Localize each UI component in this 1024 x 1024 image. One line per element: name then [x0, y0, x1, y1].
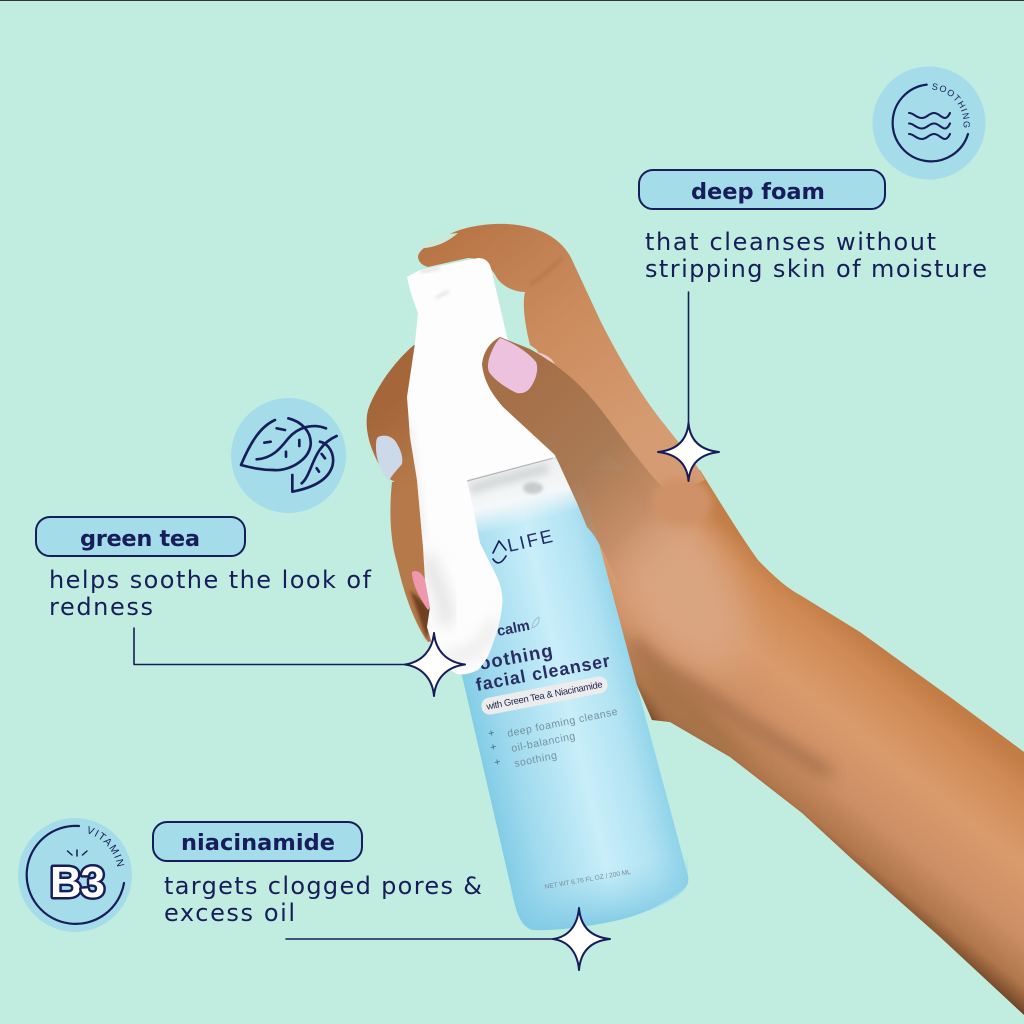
logo drop — [493, 541, 506, 563]
product name line 1: soothing — [466, 639, 555, 676]
product name line 2: facial cleanser — [474, 650, 612, 695]
logo text: LIFE — [505, 525, 557, 556]
badge: soothing: SOOTHING — [932, 84, 970, 128]
callout: niacinamide — [18, 818, 611, 971]
sparkle — [658, 423, 719, 481]
text: green tea: helps soothe the look of — [49, 566, 372, 594]
text: niacinamide: targets clogged pores & — [164, 872, 482, 900]
thumb — [482, 337, 714, 571]
pill: deep foam: deep foam — [691, 179, 825, 205]
bottle body — [420, 458, 688, 930]
net weight: NET WT 6.76 FL OZ / 200 ML — [544, 869, 632, 891]
text: deep foam: stripping skin of moisture — [645, 255, 987, 283]
foam — [407, 258, 555, 674]
benefit bullets: oil-balancing — [510, 730, 577, 755]
benefit bullets: + — [487, 727, 496, 740]
text: niacinamide: excess oil — [164, 899, 295, 927]
badge: vitamin B3 — [18, 818, 132, 932]
benefit bullets: soothing — [513, 749, 558, 770]
lower dark finger — [410, 590, 432, 640]
leaf mark — [532, 617, 539, 628]
leader line — [688, 292, 690, 426]
left fingers — [367, 345, 440, 642]
badge: soothing — [872, 66, 986, 180]
benefit bullets — [487, 706, 619, 770]
text: deep foam — [645, 228, 987, 283]
callout: green tea — [36, 398, 465, 696]
foam bubbles — [467, 458, 553, 494]
index knuckle crease — [530, 258, 562, 285]
pill: niacinamide — [153, 822, 362, 861]
nail: index tip — [533, 352, 555, 364]
pill: deep foam — [639, 170, 885, 209]
sparkle — [405, 633, 465, 696]
nail: thumb pink — [488, 338, 537, 393]
arm and hand — [367, 224, 1024, 1015]
nail: blue — [376, 436, 402, 481]
index finger — [418, 224, 705, 500]
badge: vitamin B3: VITAMIN — [88, 826, 124, 866]
benefit bullets: + — [489, 741, 498, 754]
benefit bullets: deep foaming cleanse — [506, 706, 619, 740]
pill: niacinamide: niacinamide — [181, 830, 335, 856]
nail: mint — [421, 233, 458, 248]
forearm — [575, 470, 1024, 1015]
text: green tea: redness — [49, 593, 153, 621]
benefit bullets: + — [493, 756, 502, 769]
callout: deep foam — [638, 66, 987, 482]
badge: leaves — [231, 398, 346, 513]
bottle base shade — [505, 850, 688, 930]
ingredient pill: with Green Tea & Niacinamide — [484, 678, 603, 712]
badge: vitamin B3: B3 — [50, 858, 105, 907]
text: green tea — [49, 566, 372, 621]
nail: pink little — [412, 571, 433, 610]
leader line — [134, 628, 412, 664]
clear top with foam — [460, 457, 594, 540]
sparkle — [553, 908, 610, 970]
pill: green tea: green tea — [80, 526, 200, 552]
forearm shading — [590, 493, 830, 775]
text: deep foam: that cleanses without — [645, 228, 936, 256]
pill: green tea — [36, 517, 245, 556]
text: niacinamide — [164, 872, 482, 927]
leader line — [286, 938, 557, 940]
calm label: calm — [496, 618, 531, 640]
hand seam blend — [652, 478, 712, 526]
bottle — [420, 457, 688, 930]
